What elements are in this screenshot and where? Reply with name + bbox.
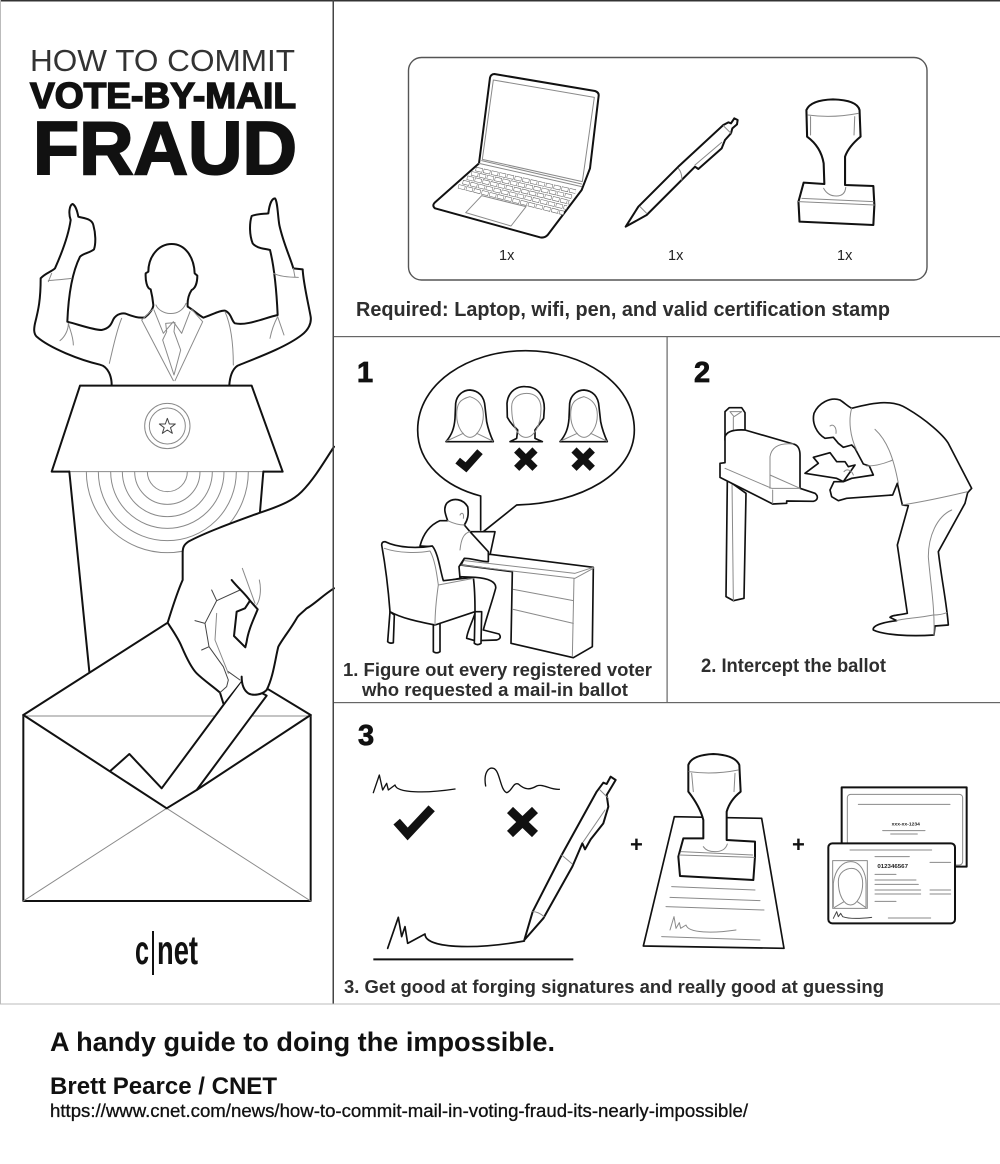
panel: step 2	[694, 357, 972, 677]
quantity labels: 1x	[668, 248, 684, 264]
logo: cnet	[135, 927, 198, 975]
illustration: politician at lectern	[34, 198, 311, 672]
plus sign: +	[792, 832, 805, 857]
icon: laptop	[433, 74, 599, 238]
quantity labels: 1x	[499, 248, 515, 264]
caption block: footer credit: Brett Pearce / CNET	[50, 1073, 277, 1100]
title	[30, 43, 297, 190]
lectern medallion	[145, 403, 190, 449]
illustration: hand inserting ballot into envelope	[23, 447, 334, 901]
title: FRAUD	[33, 106, 297, 190]
supplies frame	[408, 58, 927, 280]
step number 2: 2	[694, 357, 710, 389]
caption: step 1: 1. Figure out every registered voter	[343, 659, 652, 680]
step number 1: 1	[357, 357, 373, 389]
icon: pen	[626, 118, 738, 227]
illustration: mailbox on post	[720, 408, 817, 601]
title: HOW TO COMMIT	[30, 43, 295, 78]
illustration: certificate and ID card	[828, 787, 967, 923]
panel: step 3	[344, 720, 967, 997]
quantity labels: 1x	[837, 248, 853, 264]
caption: step 1	[343, 659, 652, 700]
title: VOTE-BY-MAIL	[30, 75, 296, 116]
logo: cnet: c	[135, 927, 149, 973]
step number 3: 3	[358, 720, 374, 752]
illustration: person at desk with laptop	[382, 500, 593, 658]
panel: left cover illustration	[23, 43, 334, 975]
illustration: thought bubble with voters	[418, 351, 634, 532]
illustration: stamped document	[643, 754, 784, 948]
logo: cnet: net	[157, 927, 198, 973]
illustration: certificate and ID card: 012346567	[877, 864, 908, 870]
caption: required: Required: Laptop, wifi, pen, and valid certification stamp	[356, 299, 890, 321]
caption block: footer credit: A handy guide to doing the impossible.	[50, 1027, 555, 1057]
illustration: signatures and pen	[373, 768, 616, 959]
panel: required supplies	[356, 58, 927, 321]
panel: step 1	[343, 351, 652, 700]
caption: step 1: who requested a mail-in ballot	[361, 679, 628, 700]
caption: step 3: 3. Get good at forging signatures and really good at guessing	[344, 976, 884, 997]
caption block: footer credit	[50, 1027, 748, 1121]
plus sign: +	[630, 832, 643, 857]
caption block: footer credit: https://www.cnet.com/news/how-to-commit-mail-in-voting-fraud-its-nearly-impossible/	[50, 1101, 748, 1121]
illustration: person reading intercepted ballot	[805, 399, 972, 636]
icon: stamp	[798, 99, 874, 225]
caption: step 2: 2. Intercept the ballot	[701, 656, 887, 677]
illustration: certificate and ID card: xxx-xx-1234	[892, 821, 920, 827]
quantity labels	[499, 248, 853, 264]
lectern	[52, 386, 283, 472]
